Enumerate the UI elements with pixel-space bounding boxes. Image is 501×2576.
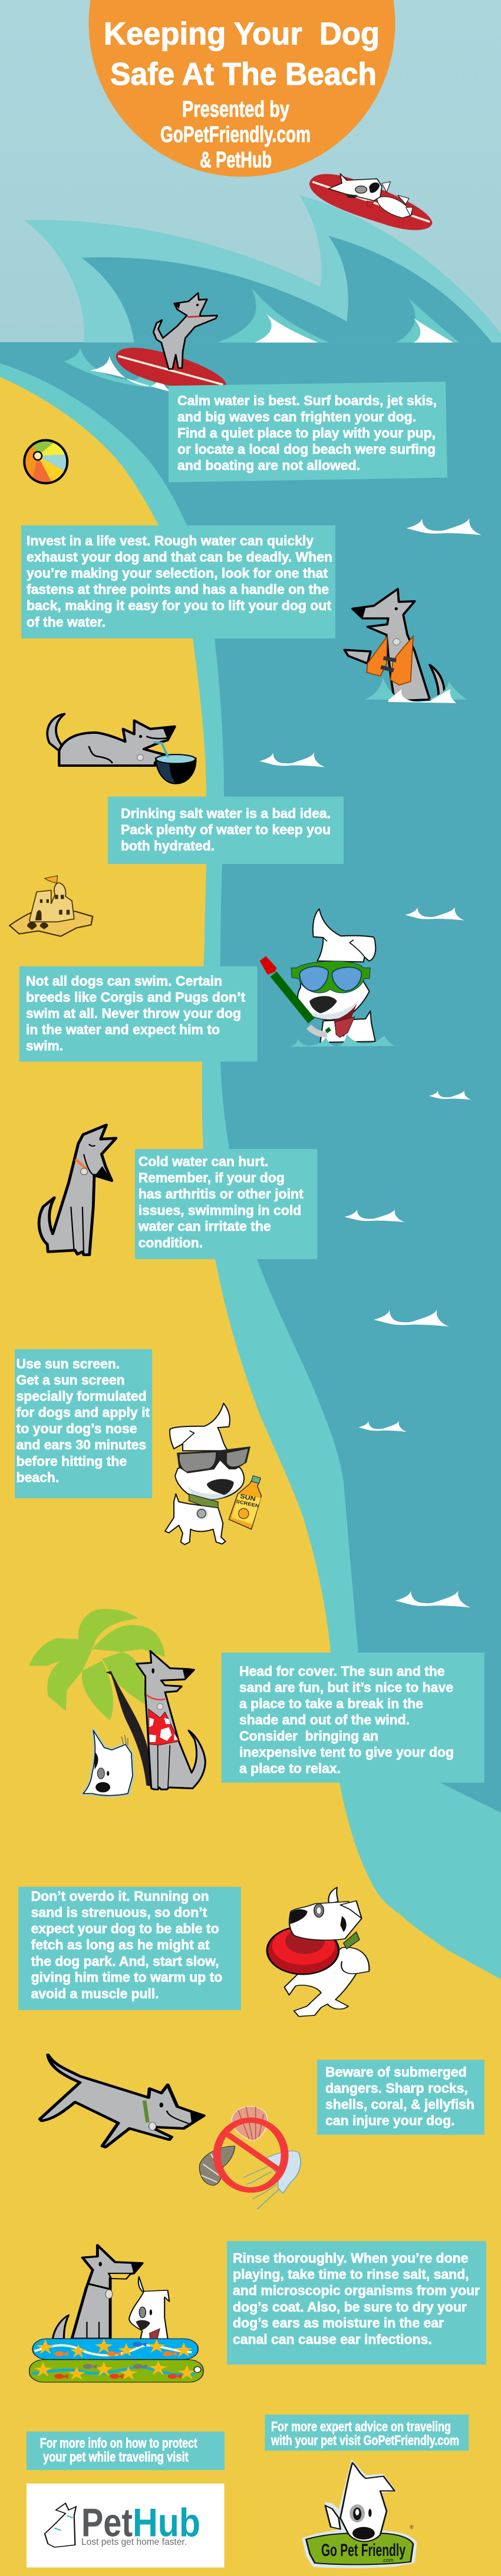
panel: cold water: issues, swimming in cold: [139, 1203, 301, 1218]
panel: head for cover: a place to relax.: [239, 1761, 341, 1776]
panel: head for cover: shade and out of the wind.: [239, 1712, 410, 1727]
icon: gray dog sniffing: [40, 2055, 204, 2147]
panel: life vest: of the water.: [27, 614, 106, 630]
panel: sun screen: [15, 1349, 152, 1498]
icon: dog with sunglasses and sunscreen: [165, 1403, 261, 1545]
logo: Go Pet Friendly: [302, 2459, 417, 2568]
icon: dog in life vest: [344, 589, 467, 703]
panel: not all dogs can swim: breeds like Corgis and Pugs don’t: [26, 989, 245, 1005]
panel: rinse thoroughly: and microscopic organisms from your: [233, 2283, 480, 2298]
title sun with heading: [88, 0, 395, 177]
icon: dog with sunglasses and sunscreen: SUN: [239, 1493, 256, 1503]
title: Safe At The Beach: [110, 57, 377, 92]
panel: cold water: condition.: [139, 1235, 203, 1250]
panel: submerged dangers: can injure your dog.: [325, 2113, 455, 2128]
panel: head for cover: [222, 1653, 484, 1783]
icon: snorkel dog: [260, 909, 395, 1047]
panel: sun screen: specially formulated: [17, 1389, 147, 1404]
panel: sun screen: and ears 30 minutes: [17, 1437, 146, 1452]
panel: don't overdo it: giving him time to warm up to: [31, 1969, 222, 1985]
icon: shells and jellyfish with no sign: [199, 2107, 301, 2209]
panel: more info: [27, 2432, 225, 2470]
panel: cold water: has arthritis or other joint: [139, 1186, 304, 1201]
icon: gray dog on surfboard: [116, 293, 226, 391]
panel: calm water: and big waves can frighten your dog.: [177, 409, 416, 424]
panel: don't overdo it: the dog park. And, start slow,: [31, 1953, 219, 1969]
title: Keeping Your Dog: [104, 16, 380, 52]
panel: sun screen: Use sun screen.: [17, 1356, 120, 1371]
panel: don't overdo it: fetch as long as he might at: [31, 1937, 210, 1952]
icon: beach ball: [24, 439, 67, 483]
presented by: & PetHub: [200, 148, 272, 173]
panel: life vest: [21, 525, 335, 638]
panel: sun screen: for dogs and apply it: [17, 1405, 150, 1420]
panel: life vest: you’re making your selection, look for one that: [27, 565, 328, 581]
icon: dog drinking from bowl: [47, 714, 196, 784]
icon: white dog with red frisbee: [267, 1888, 369, 2017]
panel: head for cover: Consider bringing an: [239, 1729, 378, 1744]
presented by: Presented by: [182, 97, 289, 122]
panel: don't overdo it: avoid a muscle pull.: [31, 1986, 159, 2001]
panel: more info: For more info on how to protect: [40, 2435, 197, 2451]
logo: PetHub: Lost pets get home faster.: [81, 2537, 187, 2547]
whitecaps middle: [344, 1090, 472, 1327]
panel: not all dogs can swim: Not all dogs can swim. Certain: [26, 973, 222, 988]
panel: don't overdo it: Don’t overdo it. Running on: [31, 1889, 209, 1904]
panel: life vest: exhaust your dog and that can be deadly. When: [27, 549, 332, 565]
panel: head for cover: inexpensive tent to give your dog: [239, 1744, 454, 1760]
panel: submerged dangers: shells, coral, & jellyfish: [325, 2097, 474, 2112]
title: [104, 16, 380, 92]
panel: not all dogs can swim: swim.: [26, 1038, 63, 1054]
panel: expert advice: For more expert advice on traveling: [271, 2419, 451, 2434]
panel: submerged dangers: [317, 2060, 484, 2135]
panel: not all dogs can swim: [19, 966, 257, 1062]
panel: not all dogs can swim: swim at all. Never throw your dog: [26, 1006, 241, 1021]
icon: white dog lying on red surfboard: [309, 174, 432, 230]
panel: calm water: or locate a local dog beach were surfing: [177, 442, 436, 457]
panel: calm water: [169, 382, 447, 482]
icon: palm tree with dogs: [29, 1609, 205, 1789]
whitecaps lower: [358, 1420, 471, 1608]
panel: salt water: Pack plenty of water to keep you: [121, 822, 331, 837]
panel: submerged dangers: Beware of submerged: [325, 2064, 467, 2080]
panel: don't overdo it: sand is strenuous, so don’t: [31, 1905, 207, 1920]
logo: PetHub: Hub: [133, 2501, 200, 2545]
panel: sun screen: to your dog’s nose: [17, 1421, 137, 1436]
panel: life vest: back, making it easy for you to lift your dog out: [27, 598, 331, 613]
panel: cold water: water can irritate the: [138, 1219, 271, 1234]
icon: dogs in wading pool: [29, 2245, 203, 2382]
panel: sun screen: before hitting the: [17, 1453, 127, 1469]
ocean water: [0, 342, 501, 2050]
panel: salt water: [108, 797, 344, 864]
icon: dog with sunglasses and sunscreen: SCREEN: [236, 1499, 260, 1509]
sky background: [0, 0, 501, 343]
panel: salt water: Drinking salt water is a bad idea.: [121, 806, 331, 821]
shoreline foam band: [0, 363, 501, 2002]
panel: submerged dangers: dangers. Sharp rocks,: [325, 2081, 468, 2096]
panel: rinse thoroughly: Rinse thoroughly. When you’re done: [233, 2250, 468, 2266]
panel: calm water: Find a quiet place to play with your pup,: [177, 425, 436, 441]
panel: life vest: Invest in a life vest. Rough water can quickly: [27, 533, 314, 548]
presented by: GoPetFriendly.com: [160, 122, 311, 147]
logo: Go Pet Friendly: Go Pet Friendly: [321, 2541, 406, 2560]
icon: sand castle: [9, 876, 93, 936]
panel: salt water: both hydrated.: [121, 838, 215, 853]
panel: rinse thoroughly: dog’s coat. Also, be sure to dry your: [233, 2299, 467, 2315]
panel: more info: your pet while traveling visit: [43, 2449, 189, 2465]
panel: rinse thoroughly: playing, take time to rinse salt, sand,: [233, 2267, 469, 2282]
presented by: [160, 97, 311, 173]
icon: small white dog: [83, 1730, 133, 1796]
panel: don't overdo it: expect your dog to be able to: [31, 1921, 219, 1936]
panel: sun screen: Get a sun screen: [17, 1372, 125, 1388]
logo: PetHub: Pet: [81, 2501, 133, 2545]
panel: calm water: and boating are not allowed.: [177, 458, 360, 473]
logo: PetHub: [27, 2484, 224, 2568]
panel: sun screen: beach.: [17, 1469, 59, 1485]
panel: cold water: Remember, if your dog: [139, 1170, 285, 1186]
logo: Go Pet Friendly: ®: [410, 2524, 414, 2530]
logo: Go Pet Friendly: .com: [382, 2557, 394, 2563]
panel: rinse thoroughly: canal can cause ear infections.: [233, 2332, 432, 2347]
panel: expert advice: [265, 2415, 469, 2451]
panel: rinse thoroughly: [227, 2241, 486, 2365]
icon: sad gray dog: [39, 1125, 116, 1255]
panel: don't overdo it: [18, 1887, 241, 2010]
panel: head for cover: Head for cover. The sun and the: [239, 1663, 445, 1678]
icon: splash under surfboard: [64, 347, 171, 392]
panel: rinse thoroughly: dog’s ears as moisture in the ear: [233, 2315, 444, 2330]
back waves: [24, 196, 501, 343]
panel: life vest: fastens at three points and has a handle on the: [27, 582, 329, 597]
whitecaps upper: [259, 517, 482, 921]
panel: head for cover: a place to take a break in the: [239, 1696, 423, 1711]
panel: cold water: [135, 1149, 317, 1259]
panel: cold water: Cold water can hurt.: [139, 1154, 268, 1169]
panel: not all dogs can swim: in the water and expect him to: [26, 1022, 220, 1037]
panel: calm water: Calm water is best. Surf boards, jet skis,: [177, 393, 437, 408]
panel: head for cover: sand are fun, but it’s nice to have: [239, 1680, 453, 1695]
